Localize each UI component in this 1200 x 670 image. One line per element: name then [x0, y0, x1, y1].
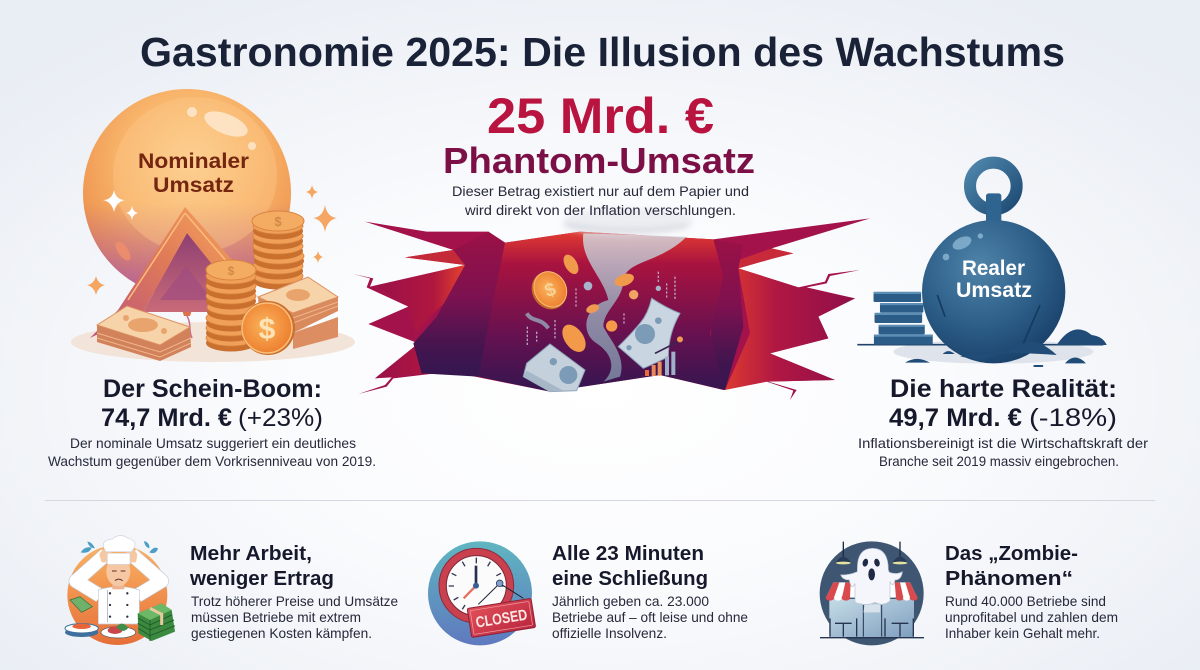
- sparkles: [87, 185, 337, 295]
- plates: [65, 597, 98, 637]
- coin stack back: $: [274, 214, 282, 229]
- dollar coin: $: [259, 313, 276, 346]
- heading: [189, 543, 334, 590]
- heading: [552, 543, 708, 590]
- ball label: [956, 257, 1032, 302]
- storefront: [820, 582, 924, 638]
- text: phantom description: Dieser Betrag existiert nur auf dem Papier und: [452, 183, 749, 199]
- ring: [970, 163, 1017, 225]
- text: Der Schein-Boom: [101, 375, 323, 432]
- text: Alle 23 Minuten: [552, 543, 748, 641]
- text: Mehr Arbeit: müssen Betriebe mit extrem: [191, 609, 361, 625]
- icon: clock with closed sign: [428, 541, 536, 645]
- text: Die harte Realität: [889, 375, 1117, 432]
- sweat drops: [81, 541, 158, 553]
- coin stack: [874, 292, 933, 345]
- rising arrow chevron: [90, 207, 236, 338]
- dish: [101, 624, 136, 638]
- icon: ghost restaurant: [820, 541, 924, 645]
- icon: stressed chef: [65, 535, 175, 645]
- bubble label: Umsatz: [153, 174, 234, 197]
- text: Mehr Arbeit: Trotz höherer Preise und Umsätze: [191, 593, 398, 609]
- rubble: [905, 329, 1107, 367]
- heading: Alle 23 Minuten: [552, 543, 704, 565]
- closed sign: CLOSED: [475, 607, 529, 632]
- ground: [893, 340, 1093, 364]
- text: Der Schein-Boom: (+23%): [238, 404, 323, 432]
- illustration: nominal revenue bubble with coins: [71, 89, 355, 362]
- text: real description: [858, 435, 1148, 469]
- cash stack: [138, 603, 175, 641]
- falling coins: [525, 252, 675, 356]
- text: nominal description: Der nominale Umsatz suggeriert ein deutliches: [70, 435, 356, 451]
- awnings: [826, 582, 918, 601]
- text: Zombie-Phänomen: Rund 40.000 Betriebe sind: [945, 593, 1106, 609]
- text: phantom description: wird direkt von der Inflation verschlungen.: [464, 202, 736, 218]
- bubble label: Nominaler: [138, 150, 249, 173]
- falling bar chart: [645, 336, 683, 376]
- heading: 25 Mrd. €: 25 Mrd. €: [487, 88, 714, 144]
- coin stack back: [252, 211, 304, 290]
- coin stack front: $: [228, 264, 235, 278]
- text: Die harte Realität: (-18%): [1029, 404, 1117, 432]
- text: Der Schein-Boom: 74,7 Mrd. €: [101, 404, 232, 432]
- illustration: chasm with falling money: [353, 208, 870, 400]
- text: Mehr Arbeit: [189, 543, 398, 641]
- ball label: Umsatz: [956, 279, 1032, 302]
- ball: [922, 220, 1065, 363]
- text: Alle 23 Minuten: offizielle Insolvenz.: [552, 625, 667, 641]
- text: Zombie-Phänomen: unprofitabel und zahlen dem: [945, 609, 1118, 625]
- text: Der Schein-Boom: Der Schein-Boom:: [103, 375, 322, 403]
- falling coins: $: [542, 278, 559, 301]
- dollar coin: [241, 301, 295, 355]
- heading: [945, 543, 1078, 590]
- heading: Phantom-Umsatz: Phantom-Umsatz: [443, 140, 755, 181]
- heading: Phänomen“: [945, 568, 1073, 590]
- cash stack left: [97, 306, 191, 361]
- text: phantom description: [452, 183, 749, 218]
- ball label: Realer: [962, 257, 1025, 280]
- text: Zombie-Phänomen: [945, 543, 1118, 641]
- text: nominal description: Wachstum gegenüber dem Vorkrisenniveau von 2019.: [48, 453, 376, 469]
- text: Mehr Arbeit: gestiegenen Kosten kämpfen.: [191, 625, 372, 641]
- heading: weniger Ertrag: [189, 568, 334, 590]
- cash stack right: [258, 277, 338, 349]
- text: Zombie-Phänomen: Inhaber kein Gehalt mehr.: [945, 625, 1100, 641]
- text: nominal description: [48, 435, 376, 469]
- coin stack front: [206, 260, 257, 352]
- ghost: [841, 548, 902, 612]
- text: Alle 23 Minuten: Jährlich geben ca. 23.000: [552, 593, 709, 609]
- text: Die harte Realität: 49,7 Mrd. €: [889, 404, 1022, 432]
- falling bills: [523, 298, 680, 392]
- heading: eine Schließung: [552, 568, 708, 590]
- smoke: [563, 208, 693, 382]
- title: Gastronomie 2025: Die Illusion des Wachstums: [140, 29, 1065, 75]
- text: real description: Branche seit 2019 massiv eingebrochen.: [879, 453, 1119, 469]
- chef body and arms: [76, 535, 162, 624]
- text: Die harte Realität: Die harte Realität:: [890, 375, 1117, 403]
- text: Alle 23 Minuten: Betriebe auf – oft leise und ohne: [552, 609, 748, 625]
- text: real description: Inflationsbereinigt ist die Wirtschaftskraft der: [858, 435, 1148, 451]
- heading: Mehr Arbeit,: [190, 543, 312, 565]
- heading: Das „Zombie-: [945, 543, 1078, 565]
- bubble: [83, 89, 291, 338]
- illustration: real revenue wrecking ball: [857, 163, 1107, 367]
- bubble label: [138, 150, 249, 197]
- lamps: [836, 542, 907, 564]
